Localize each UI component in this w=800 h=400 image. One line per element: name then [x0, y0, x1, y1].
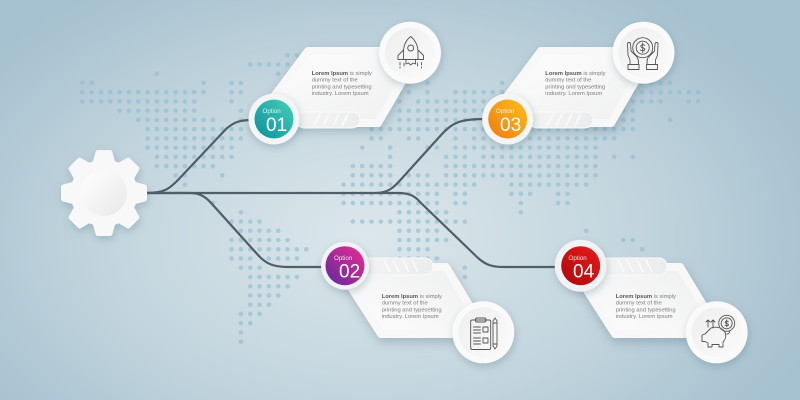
card tab	[296, 112, 360, 128]
body text: Lorem Ipsum is simply	[312, 71, 372, 77]
body text: Lorem Ipsum is simply	[545, 71, 606, 77]
option badge: 03	[500, 115, 521, 136]
body text: industry. Lorem Ipsum	[616, 314, 673, 320]
icon: piggy bank with coin	[686, 301, 748, 363]
option badge: Option	[262, 108, 281, 115]
option badge: 04	[573, 262, 595, 282]
option badge	[248, 94, 300, 144]
panel: option 04	[555, 240, 748, 363]
card body	[254, 51, 420, 123]
card body	[572, 267, 703, 334]
gear teeth and body	[64, 152, 144, 234]
option badge: 01	[266, 115, 287, 136]
option badge: Option	[334, 255, 353, 262]
body text: dummy text of the	[545, 78, 591, 84]
body text: printing and typesetting	[616, 307, 676, 313]
body text: dummy text of the	[616, 301, 662, 307]
body text: dummy text of the	[382, 301, 428, 307]
panel: option 01	[248, 22, 441, 145]
option badge: Option	[568, 255, 587, 262]
body text: printing and typesetting	[382, 307, 442, 313]
card body	[487, 51, 653, 123]
option badge: 02	[339, 262, 360, 282]
body text: industry. Lorem Ipsum	[545, 91, 602, 97]
card body	[338, 267, 469, 334]
gear centre disc	[81, 170, 127, 216]
body text: dummy text of the	[312, 78, 358, 84]
panel: option 02	[321, 242, 514, 363]
option badge	[482, 94, 533, 144]
card tab	[360, 258, 433, 275]
option badge	[555, 240, 607, 292]
option badge: Option	[496, 108, 515, 115]
gear hub	[64, 152, 144, 234]
card tab	[594, 258, 667, 275]
body text: industry. Lorem Ipsum	[382, 314, 439, 320]
panel: option 03	[482, 22, 674, 145]
card tab	[529, 112, 593, 128]
body text: Lorem Ipsum is simply	[382, 294, 442, 300]
option badge	[321, 242, 369, 290]
body text: industry. Lorem Ipsum	[312, 91, 369, 97]
connector lines	[147, 119, 562, 267]
icon: hands holding coin	[612, 22, 674, 84]
icon: clipboard and pencil	[452, 301, 514, 363]
body text: Lorem Ipsum is simply	[616, 294, 676, 300]
body text: printing and typesetting	[545, 84, 605, 90]
world map dots	[82, 55, 699, 342]
icon: rocket	[379, 22, 441, 84]
body text: printing and typesetting	[312, 84, 372, 90]
